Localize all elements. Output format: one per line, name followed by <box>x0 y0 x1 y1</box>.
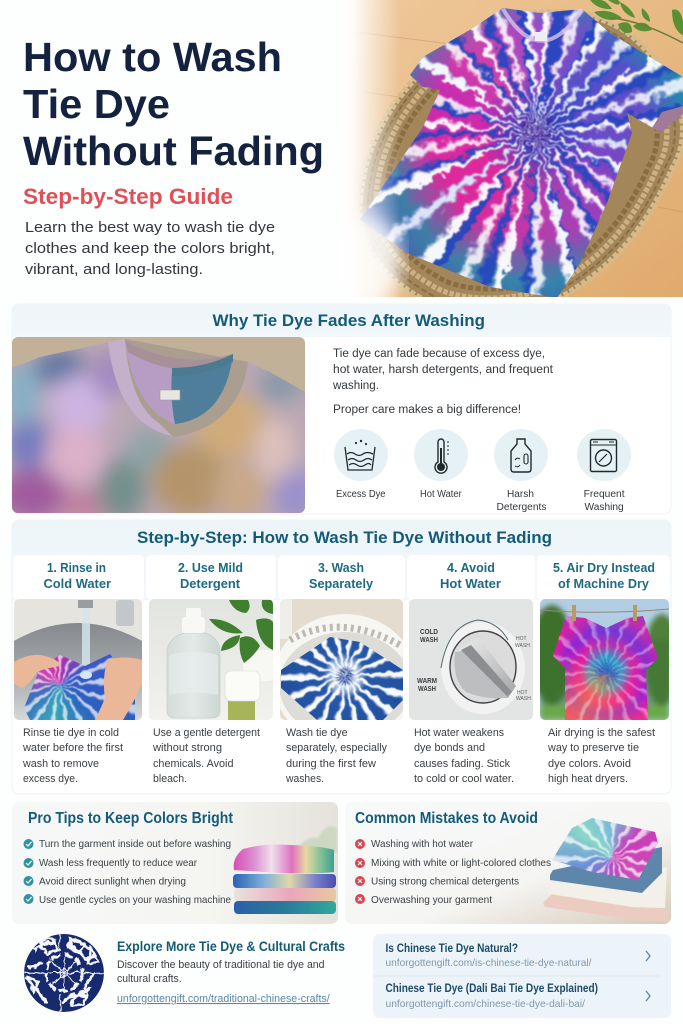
shibori circle <box>24 934 104 1012</box>
step 2 text <box>152 727 260 785</box>
wood background <box>340 0 683 297</box>
neck interior <box>125 341 233 424</box>
photo: temperature dial: HOT <box>517 690 528 696</box>
label: hot water: Hot Water <box>420 489 462 500</box>
step 1 text: Rinse tie dye in cold <box>23 727 119 739</box>
step 4 text: dye bonds and <box>414 742 485 754</box>
step 4 text <box>414 727 514 785</box>
tip 1: Turn the garment inside out before washing <box>39 838 231 850</box>
tie dye shirt <box>340 0 683 298</box>
panel: explore more <box>24 934 345 1012</box>
description: Tie dye can fade because of excess dye, <box>333 348 545 360</box>
tip 3: Avoid direct sunlight when drying <box>39 876 186 888</box>
step 3 heading: Separately <box>309 577 373 591</box>
collar <box>108 339 248 437</box>
step 2 heading: Detergent <box>180 577 241 591</box>
step 2 text: Use a gentle detergent <box>153 727 260 739</box>
photo: temperature dial: WARM <box>417 676 437 685</box>
panel: pro tips <box>12 802 338 924</box>
lower fade <box>354 208 409 297</box>
mistake 4: Overwashing your garment <box>371 894 492 906</box>
intro text: clothes and keep the colors bright, <box>25 240 275 257</box>
collar and tag <box>503 9 683 132</box>
photo: rinsing in sink <box>14 599 142 720</box>
step 2 text: chemicals. Avoid <box>153 758 234 770</box>
step 4 heading: Hot Water <box>440 577 501 591</box>
white fade into left column <box>340 0 400 297</box>
back collar band <box>125 341 233 370</box>
label: frequent washing: Washing <box>584 502 624 513</box>
step 1 heading: 1. Rinse in <box>47 561 106 575</box>
folded shirt stack <box>233 826 337 914</box>
description: cultural crafts. <box>117 973 182 985</box>
heading: Step-by-Step: How to Wash Tie Dye Without Fading <box>137 528 552 547</box>
step 2 heading <box>178 561 243 591</box>
leaves <box>590 0 683 43</box>
step 2 text: without strong <box>152 742 222 754</box>
step 5 heading: of Machine Dry <box>558 577 649 591</box>
step 1 heading <box>44 561 111 591</box>
step 1 text: water before the first <box>22 742 123 754</box>
description: hot water, harsh detergents, and frequent <box>333 364 554 376</box>
link 2: Chinese Tie Dye (Dali Bai Tie Dye Explained) <box>386 983 598 995</box>
step 1 text: wash to remove <box>22 758 99 770</box>
panel header band <box>12 304 671 337</box>
photo: temperature dial: WASH <box>515 643 530 649</box>
step 4 text: causes fading. Stick <box>414 758 510 770</box>
photo: temperature dial <box>409 599 533 720</box>
photo: temperature dial: WASH <box>516 696 531 702</box>
neck label <box>160 390 180 400</box>
step 5 text: high heat dryers. <box>548 773 628 785</box>
link 1 <box>386 943 650 969</box>
hero photo: tie dye shirt in basket <box>353 0 683 297</box>
step 2 text: bleach. <box>153 773 187 785</box>
step 5 text: dye colors. Avoid <box>548 758 631 770</box>
step 3 text: during the first few <box>286 758 376 770</box>
step 5 text: way to preserve tie <box>547 742 639 754</box>
basket <box>359 12 683 314</box>
intro text: vibrant, and long-lasting. <box>25 261 203 278</box>
title: Tie Dye <box>23 81 170 127</box>
step 5 heading: 5. Air Dry Instead <box>553 561 655 575</box>
label: harsh detergents <box>496 489 546 513</box>
description: Proper care makes a big difference! <box>333 404 521 416</box>
mistake 3: Using strong chemical detergents <box>371 876 519 888</box>
intro text: Learn the best way to wash tie dye <box>25 219 275 236</box>
step 1 text <box>22 727 123 785</box>
photo: faded shirt <box>12 337 305 513</box>
photo: temperature dial: HOT <box>516 636 527 642</box>
photo: temperature dial: WASH <box>418 684 436 693</box>
link 2 <box>386 983 650 1010</box>
icon: thermometer <box>414 429 468 481</box>
label: excess dye: Excess Dye <box>336 489 386 500</box>
photo: air dry on clothesline <box>540 599 669 720</box>
photo: temperature dial: WASH <box>420 635 438 644</box>
icon: excess dye <box>334 429 388 481</box>
cup <box>225 671 260 720</box>
step 3 text: Wash tie dye <box>286 727 348 739</box>
link 1: unforgottengift.com/is-chinese-tie-dye-natural/ <box>386 957 592 969</box>
label: frequent washing <box>584 489 625 513</box>
panel: why tie dye fades <box>0 304 671 522</box>
photo: washing separately <box>280 599 403 720</box>
title <box>23 34 324 174</box>
step 3 text: washes. <box>285 773 324 785</box>
dial knob <box>456 648 516 698</box>
title: How to Wash <box>23 34 282 80</box>
step 3 text <box>285 727 387 785</box>
label: frequent washing: Frequent <box>584 489 625 500</box>
bottle <box>167 608 220 718</box>
step 5 text: Air drying is the safest <box>548 727 655 739</box>
step 4 text: Hot water weakens <box>414 727 504 739</box>
heading: Why Tie Dye Fades After Washing <box>212 311 485 330</box>
step cards <box>13 555 670 600</box>
heading: Pro Tips to Keep Colors Bright <box>28 810 233 827</box>
panel: common mistakes <box>345 802 671 924</box>
description: Discover the beauty of traditional tie dye and <box>117 959 324 971</box>
intro text <box>25 219 275 278</box>
step 3 heading: 3. Wash <box>318 561 364 575</box>
mistake 2: Mixing with white or light-colored clothes <box>371 857 551 869</box>
tip 2: Wash less frequently to reduce wear <box>39 857 197 869</box>
step 1 text: excess dye. <box>23 773 78 785</box>
photo: mild detergent bottle <box>149 599 273 720</box>
panel header band <box>12 520 671 600</box>
step 4 text: to cold or cool water. <box>414 773 514 785</box>
folded clothes stack <box>543 810 670 922</box>
label: harsh detergents: Harsh <box>507 489 534 500</box>
link 2: unforgottengift.com/chinese-tie-dye-dali-bai/ <box>386 998 585 1010</box>
description <box>332 348 554 416</box>
step 4 heading <box>440 561 501 591</box>
description <box>117 959 324 985</box>
panel: related links <box>373 934 671 1018</box>
title: Without Fading <box>23 128 324 174</box>
step 1 heading: Cold Water <box>44 577 111 591</box>
step 2 heading: 2. Use Mild <box>178 561 243 575</box>
mistake 1: Washing with hot water <box>371 838 473 850</box>
heading: Common Mistakes to Avoid <box>355 810 538 827</box>
tip 4: Use gentle cycles on your washing machine <box>39 894 231 906</box>
link 1: Is Chinese Tie Dye Natural? <box>386 943 518 955</box>
link: unforgottengift.com/traditional-chinese-crafts/ <box>117 993 331 1005</box>
heading: Explore More Tie Dye & Cultural Crafts <box>117 939 345 954</box>
step 3 heading <box>309 561 373 591</box>
subtitle: Step-by-Step Guide <box>23 184 233 209</box>
icon: detergent bottle <box>494 429 548 481</box>
step 5 heading <box>553 561 655 591</box>
panel: step by step <box>12 520 680 794</box>
photo: temperature dial: COLD <box>420 627 438 636</box>
icon: washing machine <box>577 429 631 481</box>
step 5 text <box>547 727 655 785</box>
description: washing. <box>332 380 379 392</box>
step 3 text: separately, especially <box>286 742 387 754</box>
label: harsh detergents: Detergents <box>496 502 546 513</box>
step 4 heading: 4. Avoid <box>447 561 495 575</box>
